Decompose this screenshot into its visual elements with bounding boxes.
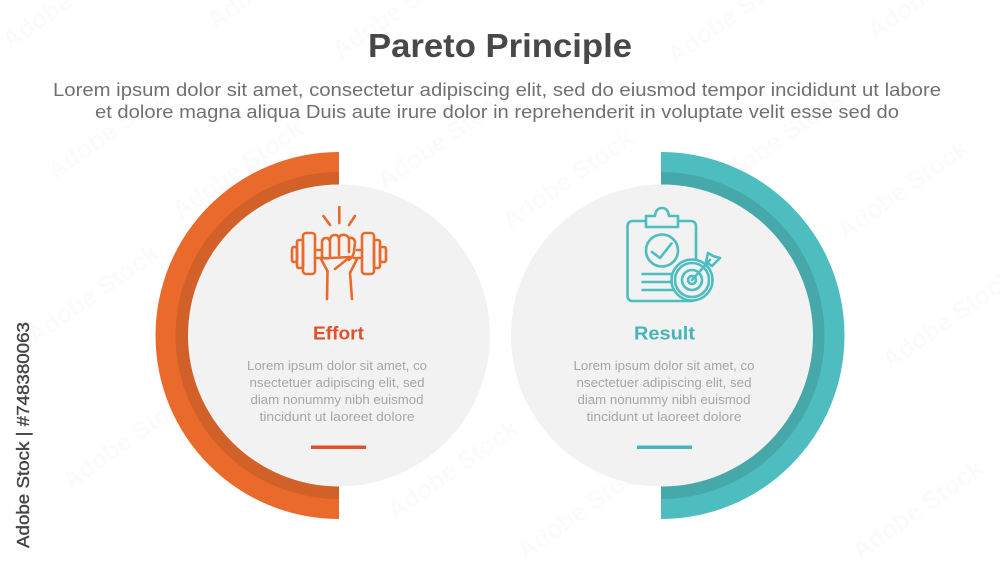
icon: fist lifting dumbbell (292, 207, 386, 299)
watermark pattern: Adobe Stock (42, 74, 184, 185)
underline: effort (311, 446, 366, 449)
watermark pattern: Adobe Stock (512, 454, 654, 563)
watermark pattern: Adobe Stock (57, 384, 199, 495)
subtitle text: et dolore magna aliqua Duis aute irure dolor in reprehenderit in voluptate velit esse sed do (95, 102, 899, 122)
gray circle (188, 184, 490, 486)
watermark pattern: Adobe Stock (707, 84, 849, 195)
text block: result (574, 358, 754, 424)
watermark pattern: Adobe Stock (497, 124, 639, 235)
text block: effort (247, 358, 427, 424)
gray circle (511, 184, 813, 486)
text block: effort: Lorem ipsum dolor sit amet, co (247, 358, 427, 373)
watermark pattern: Adobe Stock (847, 454, 989, 563)
underline: effort (637, 446, 692, 449)
watermark pattern: Adobe Stock (372, 84, 514, 195)
outer teal half ring (661, 152, 844, 519)
icon: clipboard and target (628, 208, 720, 301)
panel: result (511, 152, 844, 519)
subtitle text (53, 80, 941, 122)
stock credit: Adobe Stock | #748380063 (13, 322, 33, 548)
text block: result: tincidunt ut laoreet dolore (586, 409, 742, 424)
inner dark half ring (176, 172, 339, 499)
subtitle text: Lorem ipsum dolor sit amet, consectetur adipiscing elit, sed do eiusmod tempor incididunt ut labore (53, 80, 941, 100)
text block: effort: diam nonummy nibh euismod (250, 392, 424, 407)
title: Pareto Principle (368, 27, 632, 64)
inner dark half ring (661, 172, 825, 499)
text block: effort: tincidunt ut laoreet dolore (260, 409, 414, 424)
watermark pattern: Adobe Stock (167, 114, 309, 225)
panel: effort (155, 152, 490, 519)
heading: result: Result (634, 324, 695, 344)
watermark pattern: Adobe Stock (832, 134, 974, 245)
text block: result: Lorem ipsum dolor sit amet, co (574, 358, 754, 373)
heading: effort: Effort (313, 324, 364, 344)
text block: result: nsectetuer adipiscing elit, sed (576, 375, 752, 390)
text block: effort: nsectetuer adipiscing elit, sed (250, 375, 424, 390)
text block: result: diam nonummy nibh euismod (578, 392, 750, 407)
watermark pattern: Adobe Stock (382, 414, 524, 525)
outer orange half ring (155, 152, 339, 519)
watermark pattern: Adobe Stock (22, 239, 164, 350)
